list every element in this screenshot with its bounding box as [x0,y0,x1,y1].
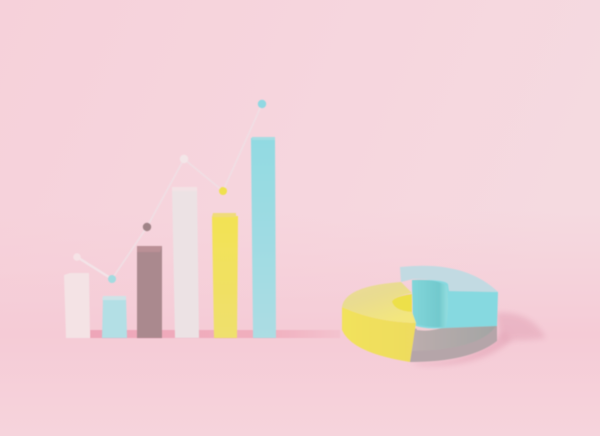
center hole [416,326,445,331]
pie chart [342,266,498,362]
bar chart [64,137,276,338]
marker 4 [180,155,188,163]
bar 6: blue [251,137,276,338]
bar shadows on floor [90,330,340,338]
yellow slice side [342,307,416,362]
yellow slice inner wall [392,294,412,312]
bar 4: white [172,187,199,338]
marker 1 [73,253,81,261]
bar 5: yellow [212,213,238,338]
blue slice inner wall [412,280,448,327]
gray slice [410,326,497,362]
marker 6 [258,100,266,108]
marker 3 [143,223,151,231]
marker 2 [108,275,116,283]
yellow slice top [342,282,416,323]
blue slice [400,266,498,329]
trend line with markers [73,100,266,283]
bar 1: white [64,273,90,338]
bar 2: light blue [102,296,127,338]
pie chart shadow [496,313,546,340]
blue slice front [412,280,498,329]
bar 3: mauve [137,246,162,338]
blue slice top [400,266,498,292]
floor [0,210,600,436]
yellow slice [342,282,416,362]
trend line [77,257,112,279]
marker 5 [219,187,227,195]
